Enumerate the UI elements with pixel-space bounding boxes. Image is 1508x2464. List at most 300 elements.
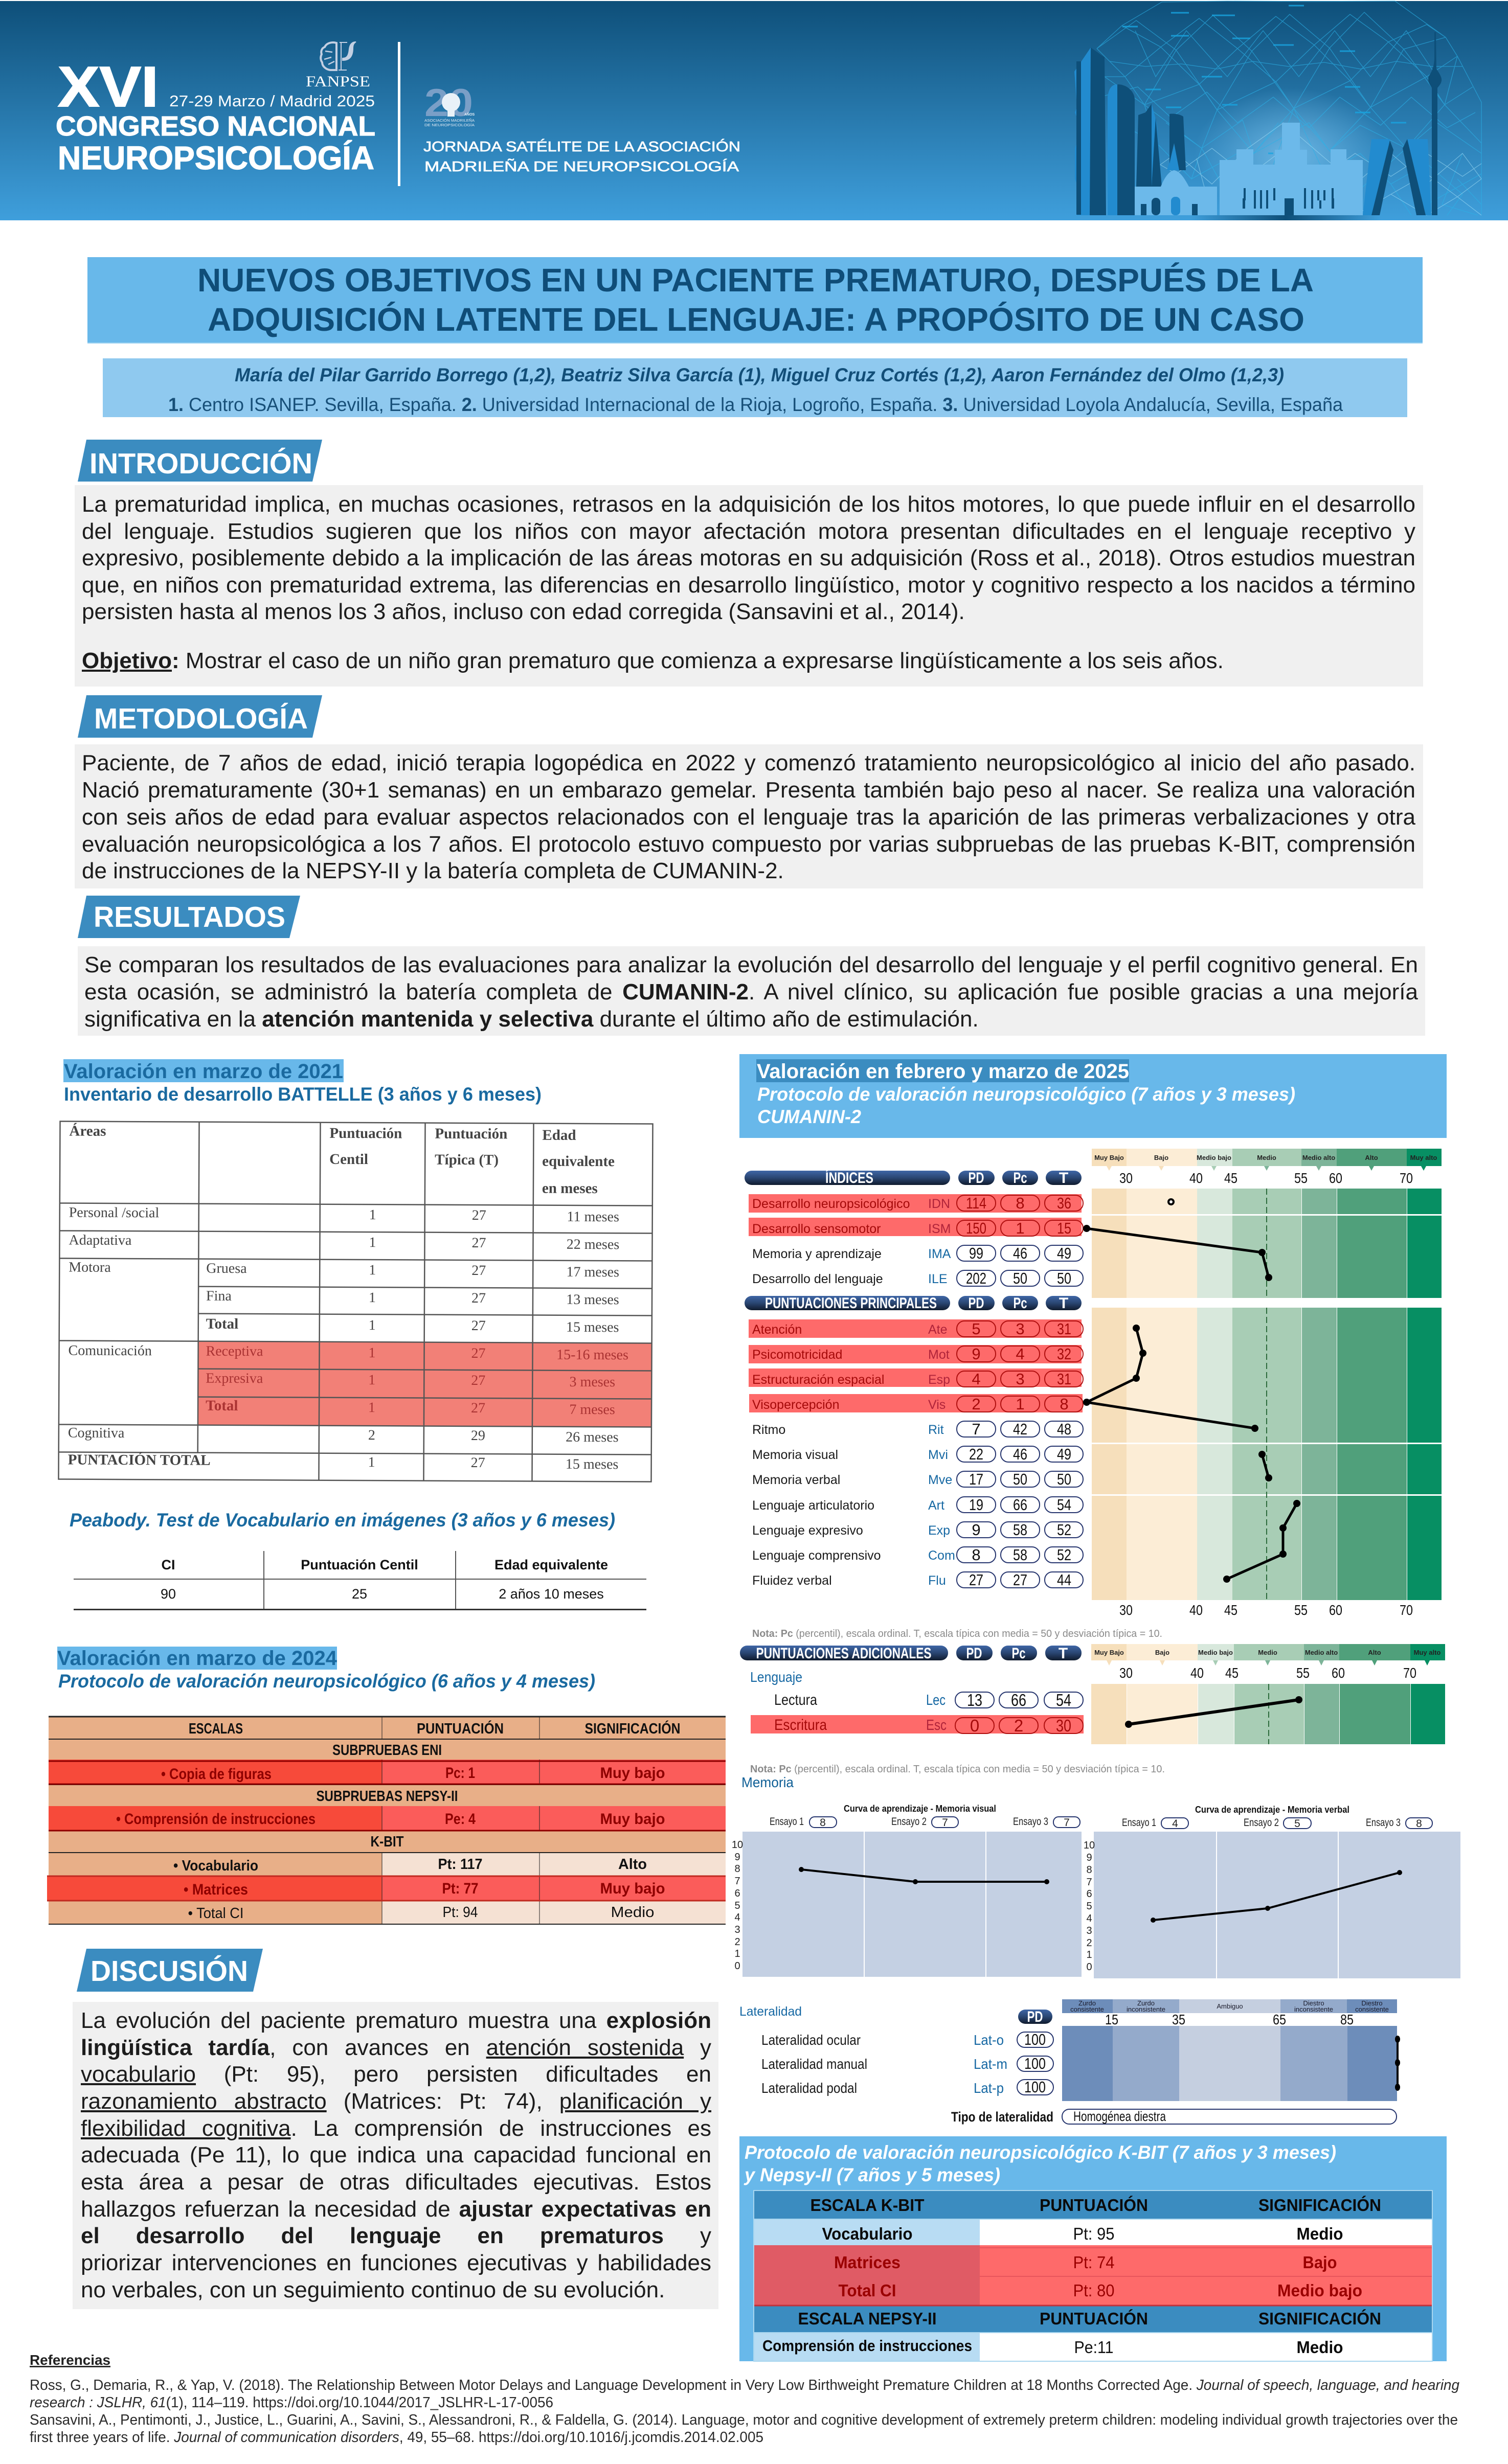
table: K-BIT y Nepsy-II: Pe:11 bbox=[1074, 2338, 1114, 2357]
heading: Introducción: INTRODUCCIÓN bbox=[89, 447, 312, 480]
icon: FANPSE logo bbox=[306, 42, 370, 90]
panel: resultados text: esta ocasión, se administró la batería completa de CUMANIN-2. A nivel clínico, su aplicación fue posible gracias a una mejoría bbox=[84, 979, 1418, 1005]
table: Battelle scores: equivalente bbox=[542, 1153, 615, 1170]
row: Estructuración espacial bbox=[749, 1368, 1083, 1388]
chart: lateralidad: Homogénea diestra bbox=[1073, 2109, 1166, 2124]
panel: introducción text: del lenguaje. Estudios sugieren que los niños con mayor afectación motora presentan dificultades en el lenguaje receptivo y bbox=[82, 519, 1415, 544]
heading: K-BIT: y Nepsy-II (7 años y 5 meses) bbox=[744, 2164, 1000, 2185]
row: Lenguaje articulatorio bbox=[752, 1496, 1083, 1514]
row: Lenguaje comprensivo: 52 bbox=[1057, 1546, 1071, 1564]
row: Psicomotricidad: 4 bbox=[1016, 1345, 1025, 1363]
heading: K-BIT: Protocolo de valoración neuropsicológico K-BIT (7 años y 3 meses) bbox=[745, 2142, 1336, 2163]
panel: discusión text: esta área a pesar de otras dificultades ejecutivas. Estos bbox=[81, 2170, 711, 2195]
table: valoración 2024: Pt: 77 bbox=[442, 1880, 479, 1897]
chart: lateralidad: consistente bbox=[1070, 2005, 1104, 2013]
panel: discusión text: La evolución del paciente prematuro muestra una explosión bbox=[81, 2008, 711, 2033]
pills: índices header: PD bbox=[969, 1170, 984, 1187]
row: Visopercepción: Vis bbox=[928, 1398, 946, 1412]
chart: curva de aprendizaje memoria visual: 9 bbox=[734, 1852, 740, 1863]
chart: curva de aprendizaje memoria visual: 2 bbox=[734, 1936, 740, 1948]
row: Memoria y aprendizaje: 46 bbox=[1013, 1244, 1027, 1262]
table: Battelle scores: 15 meses bbox=[566, 1319, 619, 1335]
row: Estructuración espacial: 31 bbox=[1057, 1370, 1071, 1388]
chart legend: adicionales bands: 30 bbox=[1119, 1665, 1133, 1681]
table: Peabody: 25 bbox=[352, 1586, 367, 1602]
label: Lateralidad: Lateralidad bbox=[739, 2004, 802, 2019]
table: Battelle scores: 1 bbox=[369, 1207, 376, 1223]
table: Battelle scores: 1 bbox=[369, 1262, 376, 1278]
panel: discusión text: hallazgos refuerzan la necesidad de ajustar expectativas en bbox=[81, 2197, 711, 2222]
chart: adicionales profile bbox=[1091, 1684, 1445, 1744]
table: K-BIT y Nepsy-II: Pt: 95 bbox=[1073, 2224, 1115, 2243]
objetivo: Objetivo: Mostrar el caso de un niño gran prematuro que comienza a expresarse lingüísticamente a los seis años. bbox=[82, 648, 1224, 673]
pills: índices header: ÍNDICES bbox=[825, 1169, 873, 1187]
table: K-BIT y Nepsy-II: Medio bajo bbox=[1277, 2281, 1362, 2300]
panel: resultados text: Se comparan los resultados de las evaluaciones para analizar la evolución del desarrollo del lenguaje y el perfil cognitivo general. En bbox=[84, 952, 1418, 977]
chart: curva de aprendizaje memoria visual: Ensayo 1 bbox=[770, 1816, 804, 1828]
chart: puntuaciones principales profile: 60 bbox=[1329, 1602, 1342, 1618]
pills: puntuaciones principales header: Pc bbox=[1014, 1295, 1027, 1312]
chart legend: score bands: Alto bbox=[1365, 1154, 1378, 1161]
table: Peabody: Edad equivalente bbox=[494, 1557, 608, 1572]
congress title XVI bbox=[56, 55, 375, 176]
table: Battelle scores bbox=[58, 1121, 653, 1482]
panel: valoración marzo 2024 heading: Protocolo de valoración neuropsicológico (6 años y 4 meses) bbox=[58, 1671, 595, 1692]
row: Lenguaje articulatorio: 54 bbox=[1057, 1496, 1071, 1514]
row: Memoria y aprendizaje: Memoria y aprendizaje bbox=[752, 1247, 882, 1261]
chart: curva de aprendizaje memoria verbal: 1 bbox=[1086, 1949, 1092, 1960]
chart: lateralidad: Diestro bbox=[1361, 1999, 1383, 2007]
chart: lateralidad: Zurdo bbox=[1137, 1999, 1155, 2007]
table: Battelle scores: 11 meses bbox=[567, 1209, 619, 1225]
row: Desarrollo del lenguaje: Desarrollo del lenguaje bbox=[752, 1272, 883, 1286]
chart: puntuaciones principales profile: 45 bbox=[1224, 1602, 1237, 1618]
chart: lateralidad: Ambiguo bbox=[1217, 2002, 1243, 2010]
table: Battelle scores: 17 meses bbox=[566, 1264, 619, 1280]
table: valoración 2024: • Copia de figuras bbox=[161, 1766, 272, 1783]
table: Battelle scores: Adaptativa bbox=[69, 1233, 132, 1248]
chart: lateralidad: Tipo de lateralidad bbox=[951, 2109, 1053, 2125]
row: Psicomotricidad bbox=[749, 1345, 1083, 1363]
chart: índices profile bbox=[1083, 1189, 1442, 1298]
chart: curva de aprendizaje memoria visual: 10 bbox=[732, 1839, 743, 1851]
chart legend: score bands: Medio bajo bbox=[1197, 1154, 1231, 1161]
row: Atención: 31 bbox=[1057, 1320, 1071, 1338]
table: K-BIT y Nepsy-II: Comprensión de instrucciones bbox=[762, 2337, 972, 2355]
row: Visopercepción bbox=[749, 1394, 1083, 1413]
chart legend: score bands: 60 bbox=[1329, 1170, 1342, 1186]
chart: curva de aprendizaje memoria visual: 7 bbox=[1064, 1817, 1070, 1829]
chart: lateralidad: Zurdo bbox=[1078, 1999, 1096, 2007]
table: Battelle scores: PUNTACIÓN TOTAL bbox=[68, 1451, 211, 1469]
table: valoración 2024 bbox=[47, 1717, 726, 1924]
table: Battelle scores: 27 bbox=[471, 1373, 485, 1388]
chart legend: score bands: Medio alto bbox=[1302, 1154, 1335, 1161]
row: Desarrollo del lenguaje: 202 bbox=[966, 1269, 986, 1287]
panel: resultados text: significativa en la atención mantenida y selectiva durante el último año de estimulación. bbox=[84, 1007, 979, 1032]
row: Memoria visual: Memoria visual bbox=[752, 1448, 838, 1462]
label: Memoria: Memoria bbox=[741, 1774, 794, 1790]
row: Lenguaje expresivo: Lenguaje expresivo bbox=[752, 1523, 863, 1538]
table: Battelle scores: 27 bbox=[471, 1400, 485, 1416]
table: Battelle scores: Puntuación bbox=[329, 1125, 402, 1142]
header banner bbox=[0, 1, 1508, 220]
row: Escritura: Esc bbox=[926, 1717, 947, 1733]
row: Desarrollo neuropsicológico: 8 bbox=[1016, 1194, 1025, 1212]
table: Battelle scores: 27 bbox=[471, 1455, 485, 1471]
chart legend: score bands: 30 bbox=[1119, 1170, 1133, 1186]
chart: lateralidad: inconsistente bbox=[1294, 2005, 1333, 2013]
panel: discusión text: priorizar intervenciones en funciones ejecutivas y habilidades bbox=[81, 2250, 711, 2275]
table: valoración 2024: Muy bajo bbox=[600, 1765, 665, 1782]
table: Battelle scores: 1 bbox=[368, 1345, 376, 1361]
row: Psicomotricidad: Psicomotricidad bbox=[752, 1348, 842, 1362]
table: Battelle scores: Total bbox=[206, 1316, 238, 1332]
chart: curva de aprendizaje memoria visual: 1 bbox=[734, 1948, 740, 1959]
chart: lateralidad: 35 bbox=[1172, 2012, 1185, 2027]
chart: curva de aprendizaje memoria verbal: Ensayo 1 bbox=[1122, 1817, 1156, 1829]
row: Estructuración espacial: Estructuración espacial bbox=[752, 1373, 884, 1387]
chart: curva de aprendizaje memoria verbal: 8 bbox=[1416, 1818, 1422, 1830]
row: Psicomotricidad: 32 bbox=[1057, 1345, 1071, 1363]
panel: valoración 2025 heading: Valoración en febrero y marzo de 2025 bbox=[757, 1060, 1129, 1083]
table: Battelle scores: 22 meses bbox=[567, 1237, 619, 1252]
row: Lenguaje expresivo: Exp bbox=[928, 1523, 950, 1538]
table: Battelle scores: 27 bbox=[472, 1207, 486, 1223]
heading: Peabody: Peabody. Test de Vocabulario en imágenes (3 años y 6 meses) bbox=[70, 1510, 615, 1531]
table: Battelle scores: Total bbox=[206, 1398, 238, 1414]
table: K-BIT y Nepsy-II: Medio bbox=[1297, 2224, 1343, 2243]
chart: curva de aprendizaje memoria verbal: Ensayo 3 bbox=[1366, 1817, 1401, 1829]
table: valoración 2024: • Total CI bbox=[188, 1905, 243, 1922]
panel: metodología text: con seis años de edad para evaluar aspectos relacionados con el lenguaje tras la aparición de las primeras verbalizaciones y otra bbox=[82, 805, 1415, 830]
panel: discusión text: el desarrollo del lenguaje en prematuros y bbox=[81, 2223, 711, 2248]
chart: curva de aprendizaje memoria verbal: Ensayo 2 bbox=[1244, 1817, 1279, 1829]
table: valoración 2024: Medio bbox=[611, 1904, 655, 1921]
row: Lenguaje comprensivo: 8 bbox=[972, 1546, 981, 1564]
panel: valoración marzo 2021 heading: Inventario de desarrollo BATTELLE (3 años y 6 meses) bbox=[64, 1084, 542, 1105]
row: Memoria verbal: 17 bbox=[969, 1470, 983, 1488]
chart: curva de aprendizaje memoria visual: 8 bbox=[734, 1863, 740, 1875]
table: Battelle scores: 15 meses bbox=[566, 1456, 618, 1472]
chart legend: adicionales bands: 60 bbox=[1332, 1665, 1345, 1681]
authors and affiliations: 1. Centro ISANEP. Sevilla, España. 2. Universidad Internacional de la Rioja, Logroño, España. 3. Universidad Loyola Andalucía, Sevilla, España bbox=[168, 394, 1343, 415]
chart: curva de aprendizaje memoria visual: 4 bbox=[734, 1912, 740, 1923]
table: valoración 2024: Muy bajo bbox=[600, 1880, 665, 1897]
row: Desarrollo sensomotor bbox=[749, 1218, 1083, 1237]
table: K-BIT y Nepsy-II: ESCALA K-BIT bbox=[810, 2196, 925, 2215]
row: Lenguaje articulatorio: 66 bbox=[1013, 1496, 1027, 1514]
table: Battelle scores: Motora bbox=[69, 1260, 111, 1275]
row: Desarrollo del lenguaje bbox=[752, 1269, 1083, 1287]
panel: introducción text: que, en niños con prematuridad extrema, las diferencias en desarrollo lingüístico, motor y cognitivo respecto a los nacidos a término bbox=[82, 573, 1415, 598]
panel: metodología text: Paciente, de 7 años de edad, inició terapia logopédica en 2022 y comenzó tratamiento neuropsicológico al inicio del año pasado. bbox=[82, 750, 1415, 775]
table: Battelle scores: 1 bbox=[369, 1235, 376, 1250]
chart: lateralidad: 15 bbox=[1105, 2012, 1118, 2027]
table: Battelle scores: 1 bbox=[368, 1372, 375, 1388]
table: Peabody: Puntuación Centil bbox=[301, 1557, 418, 1572]
pills: puntuaciones principales header: PD bbox=[969, 1295, 984, 1312]
row: Estructuración espacial: 4 bbox=[972, 1370, 981, 1388]
panel: valoración marzo 2024 heading: Valoración en marzo de 2024 bbox=[57, 1647, 337, 1670]
chart: curva de aprendizaje memoria verbal: 2 bbox=[1086, 1937, 1092, 1949]
pills: índices header: T bbox=[1059, 1170, 1068, 1187]
chart legend: adicionales bands: 40 bbox=[1190, 1665, 1204, 1681]
row: Memoria verbal: 50 bbox=[1013, 1470, 1027, 1488]
panel: discusión text: adecuada (Pe 11), lo que indica una capacidad funcional en bbox=[81, 2142, 711, 2168]
row: Lenguaje articulatorio: Lenguaje articulatorio bbox=[752, 1498, 874, 1513]
divider bbox=[398, 42, 400, 186]
congress title XVI: NEUROPSICOLOGÍA bbox=[58, 140, 374, 176]
chart legend: score bands: Muy alto bbox=[1410, 1154, 1437, 1161]
table: K-BIT y Nepsy-II: SIGNIFICACIÓN bbox=[1258, 2196, 1381, 2215]
chart: lateralidad: Lat-o bbox=[974, 2032, 1004, 2048]
chart legend: adicionales bands: Alto bbox=[1368, 1649, 1381, 1656]
table: K-BIT y Nepsy-II: Pt: 74 bbox=[1073, 2253, 1115, 2272]
chart: curva de aprendizaje memoria verbal: 8 bbox=[1086, 1864, 1092, 1876]
panel: introducción text: persisten hasta al menos los 3 años, incluso con edad corregida (Sansavini et al., 2014). bbox=[82, 599, 965, 624]
table: Battelle scores: 13 meses bbox=[566, 1292, 619, 1308]
table: valoración 2024: Pt: 94 bbox=[443, 1904, 478, 1921]
icon: 20 years logo: DE NEUROPSICOLOGÍA bbox=[424, 123, 475, 127]
table: valoración 2024: SUBPRUEBAS NEPSY-II bbox=[316, 1788, 458, 1805]
chart: puntuaciones principales profile: 40 bbox=[1189, 1602, 1203, 1618]
row: Desarrollo del lenguaje: ILE bbox=[928, 1272, 948, 1286]
table: Battelle scores: 3 meses bbox=[570, 1374, 615, 1390]
row: Memoria verbal: 50 bbox=[1057, 1470, 1071, 1488]
table: Battelle scores: 15-16 meses bbox=[556, 1347, 628, 1363]
chart: curva de aprendizaje memoria verbal: Curva de aprendizaje - Memoria verbal bbox=[1195, 1805, 1349, 1815]
chart legend: score bands: 55 bbox=[1294, 1170, 1308, 1186]
pills: puntuaciones adicionales header: PD bbox=[966, 1645, 982, 1662]
chart: curva de aprendizaje memoria visual: Ensayo 3 bbox=[1013, 1816, 1048, 1828]
table: Battelle scores: Cognitiva bbox=[68, 1425, 125, 1441]
chart: lateralidad: 100 bbox=[1024, 2030, 1046, 2048]
chart: curva de aprendizaje memoria verbal: 6 bbox=[1086, 1888, 1092, 1900]
table: valoración 2024: Muy bajo bbox=[600, 1811, 665, 1828]
table: valoración 2024: ESCALAS bbox=[189, 1721, 243, 1737]
row: Desarrollo neuropsicológico: 114 bbox=[966, 1194, 986, 1212]
row: Ritmo: Ritmo bbox=[752, 1423, 785, 1437]
pills: puntuaciones adicionales header bbox=[740, 1645, 1082, 1662]
table: Peabody: 90 bbox=[161, 1586, 176, 1602]
chart: lateralidad: Lateralidad manual bbox=[761, 2056, 867, 2072]
title banner: NUEVOS OBJETIVOS EN UN PACIENTE PREMATURO, DESPUÉS DE LA bbox=[197, 262, 1314, 299]
chart: lateralidad: inconsistente bbox=[1127, 2005, 1165, 2013]
pills: puntuaciones principales header: PUNTUACIONES PRINCIPALES bbox=[765, 1295, 937, 1312]
satellite conference text bbox=[423, 139, 740, 174]
chart legend: score bands: Muy Bajo bbox=[1094, 1154, 1124, 1161]
chart: lateralidad: 100 bbox=[1024, 2055, 1046, 2072]
chart: curva de aprendizaje memoria visual: 7 bbox=[734, 1876, 740, 1887]
chart: curva de aprendizaje memoria verbal: 4 bbox=[1172, 1818, 1178, 1830]
table: valoración 2024: K-BIT bbox=[370, 1834, 404, 1850]
row: Memoria y aprendizaje bbox=[752, 1244, 1083, 1262]
chart legend: adicionales bands bbox=[1091, 1644, 1445, 1681]
table: Battelle scores: 1 bbox=[369, 1317, 376, 1333]
chart: lateralidad: consistente bbox=[1355, 2005, 1389, 2013]
chart: curva de aprendizaje memoria verbal: 9 bbox=[1086, 1852, 1092, 1863]
panel: discusión text: razonamiento abstracto (Matrices: Pt: 74), planificación y bbox=[81, 2089, 711, 2114]
row: Lectura: 66 bbox=[1011, 1691, 1026, 1709]
row: Memoria y aprendizaje: 99 bbox=[969, 1244, 983, 1262]
pills: puntuaciones adicionales header: PUNTUACIONES ADICIONALES bbox=[756, 1645, 932, 1662]
row: Lenguaje expresivo: 58 bbox=[1013, 1521, 1027, 1539]
authors and affiliations: María del Pilar Garrido Borrego (1,2), Beatriz Silva García (1), Miguel Cruz Cortés (1,2), Aaron Fernández del Olmo (1,2,3) bbox=[235, 364, 1284, 385]
row: Memoria visual bbox=[752, 1445, 1083, 1463]
chart: curva de aprendizaje memoria visual: Curva de aprendizaje - Memoria visual bbox=[844, 1804, 996, 1814]
chart legend: score bands: 70 bbox=[1400, 1170, 1413, 1186]
table: Battelle scores: 27 bbox=[471, 1263, 486, 1279]
table: Battelle scores: Fina bbox=[206, 1288, 232, 1304]
table: Battelle scores: 29 bbox=[471, 1428, 485, 1444]
chart: lateralidad: 100 bbox=[1024, 2078, 1046, 2096]
chart: curva de aprendizaje memoria verbal: 4 bbox=[1086, 1913, 1092, 1924]
row: Ritmo: 48 bbox=[1057, 1420, 1071, 1438]
chart legend: score bands: 45 bbox=[1224, 1170, 1237, 1186]
panel: discusión text: vocabulario (Pt: 95), pero persisten dificultades en bbox=[81, 2062, 711, 2087]
panel: introducción text: expresivo, posiblemente debido a la implicación de las áreas motoras en su adquisición (Ross et al., 2018). Otros estudios muestran bbox=[82, 545, 1415, 571]
congress title XVI: CONGRESO NACIONAL bbox=[56, 111, 375, 142]
panel: discusión text: lingüística tardía, con avances en atención sostenida y bbox=[81, 2035, 711, 2060]
row: Desarrollo del lenguaje: 50 bbox=[1013, 1269, 1027, 1287]
chart legend: score bands bbox=[1092, 1149, 1442, 1186]
row: Lenguaje comprensivo bbox=[752, 1546, 1083, 1564]
chart: puntuaciones principales profile: 30 bbox=[1119, 1602, 1133, 1618]
chart: curva de aprendizaje memoria visual: 5 bbox=[734, 1900, 740, 1911]
chart: lateralidad: 65 bbox=[1273, 2012, 1286, 2027]
table: K-BIT y Nepsy-II: PUNTUACIÓN bbox=[1040, 2196, 1148, 2215]
row: Lenguaje comprensivo: Lenguaje comprensivo bbox=[752, 1548, 881, 1563]
row: Visopercepción: 8 bbox=[1060, 1395, 1069, 1413]
chart legend: adicionales bands: Medio bbox=[1258, 1649, 1277, 1656]
row: Escritura: Escritura bbox=[774, 1717, 827, 1733]
table: Battelle scores: 27 bbox=[471, 1235, 486, 1251]
row: Fluidez verbal bbox=[752, 1571, 1083, 1589]
table: valoración 2024: Pe: 4 bbox=[445, 1811, 476, 1828]
row: Estructuración espacial: 3 bbox=[1016, 1370, 1025, 1388]
row: Escritura: 0 bbox=[970, 1716, 979, 1735]
chart: lateralidad bbox=[739, 1999, 1400, 2125]
chart: curva de aprendizaje memoria verbal bbox=[1084, 1805, 1460, 1978]
row: Lenguaje expresivo: 52 bbox=[1057, 1521, 1071, 1539]
chart legend: adicionales bands: 55 bbox=[1296, 1665, 1310, 1681]
references: Sansavini, A., Pentimonti, J., Justice, L., Guarini, A., Savini, S., Alessandroni, R., & Faldella, G. (2014). Language, motor and cognitive development of extremely preterm children: modeling individual growth trajectories over the bbox=[30, 2412, 1458, 2428]
satellite conference text: MADRILEÑA DE NEUROPSICOLOGÍA bbox=[424, 158, 739, 174]
table: K-BIT y Nepsy-II: Matrices bbox=[834, 2253, 901, 2272]
row: Lectura: Lectura bbox=[774, 1692, 817, 1708]
pills: puntuaciones adicionales header: T bbox=[1059, 1645, 1068, 1662]
table: K-BIT y Nepsy-II: Bajo bbox=[1303, 2253, 1337, 2272]
row: Memoria verbal bbox=[752, 1470, 1083, 1488]
row: Memoria y aprendizaje: 49 bbox=[1057, 1244, 1071, 1262]
table: Battelle scores: Personal /social bbox=[69, 1205, 160, 1221]
row: Atención bbox=[749, 1319, 1083, 1338]
heading: Metodología: METODOLOGÍA bbox=[94, 702, 308, 735]
chart legend: adicionales bands: 45 bbox=[1225, 1665, 1239, 1681]
chart legend: score bands: Medio bbox=[1257, 1154, 1276, 1161]
chart: curva de aprendizaje memoria verbal: 10 bbox=[1084, 1840, 1095, 1851]
chart legend: adicionales bands: Bajo bbox=[1155, 1649, 1169, 1656]
chart: lateralidad: Lat-m bbox=[974, 2056, 1007, 2072]
pills: puntuaciones principales header bbox=[745, 1295, 1082, 1312]
table: Battelle scores: Gruesa bbox=[206, 1261, 247, 1276]
table: Battelle scores: Expresiva bbox=[206, 1371, 263, 1386]
row: Memoria visual: 46 bbox=[1013, 1445, 1027, 1463]
pills: índices header bbox=[745, 1169, 1082, 1187]
icon: 20 years logo: AÑOS bbox=[464, 112, 475, 117]
table: K-BIT y Nepsy-II: PUNTUACIÓN bbox=[1040, 2309, 1148, 2328]
table: Peabody bbox=[74, 1551, 646, 1610]
row: Desarrollo sensomotor: 150 bbox=[966, 1219, 986, 1237]
chart: curva de aprendizaje memoria verbal: 3 bbox=[1086, 1925, 1092, 1936]
table: Battelle scores: Receptiva bbox=[206, 1343, 263, 1359]
chart: lateralidad: 85 bbox=[1340, 2012, 1354, 2027]
chart legend: adicionales bands: Muy Bajo bbox=[1094, 1649, 1124, 1656]
table: Battelle scores: Típica (T) bbox=[435, 1152, 499, 1168]
chart legend: adicionales bands: Medio bajo bbox=[1198, 1649, 1233, 1656]
chart: curva de aprendizaje memoria visual: 6 bbox=[734, 1888, 740, 1899]
row: Lenguaje expresivo: 9 bbox=[972, 1521, 981, 1539]
table: K-BIT y Nepsy-II: SIGNIFICACIÓN bbox=[1258, 2309, 1381, 2328]
icon: Madrid skyline with network dome bbox=[1074, 1, 1481, 220]
table: Battelle scores: 27 bbox=[471, 1345, 486, 1361]
note: escala 1: Nota: Pc (percentil), escala ordinal. T, escala típica con media = 50 y desviación típica = 10. bbox=[752, 1628, 1162, 1639]
icon: FANPSE logo: FANPSE bbox=[306, 73, 370, 90]
chart legend: score bands: 40 bbox=[1189, 1170, 1203, 1186]
row: Desarrollo neuropsicológico: IDN bbox=[928, 1197, 950, 1211]
table: Battelle scores: 1 bbox=[368, 1400, 375, 1416]
table: K-BIT y Nepsy-II bbox=[754, 2191, 1432, 2361]
chart legend: adicionales bands: Muy alto bbox=[1414, 1649, 1441, 1656]
heading: Resultados bbox=[78, 896, 300, 938]
row: Fluidez verbal: 27 bbox=[969, 1571, 983, 1589]
authors and affiliations bbox=[103, 358, 1407, 417]
chart: lateralidad: Lat-p bbox=[974, 2080, 1004, 2096]
row: Escritura: 2 bbox=[1014, 1716, 1023, 1735]
references: Ross, G., Demaria, R., & Yap, V. (2018). The Relationship Between Motor Delays and Language Development in Very Low Birthweight Premature Children at 18 Months Corrected Age. Journal of speech, language, and hearing bbox=[30, 2377, 1459, 2393]
table: valoración 2024: SUBPRUEBAS ENI bbox=[332, 1742, 442, 1759]
row: Memoria verbal: Memoria verbal bbox=[752, 1473, 840, 1487]
row: Ritmo bbox=[752, 1420, 1083, 1438]
chart legend: score bands: Bajo bbox=[1154, 1154, 1168, 1161]
panel: metodología text: Nació prematuramente (30+1 semanas) en un embarazo gemelar. Presenta también bajo peso al nacer. Se realiza una valoración bbox=[82, 778, 1415, 803]
chart: curva de aprendizaje memoria verbal: 0 bbox=[1086, 1961, 1092, 1973]
row: Memoria visual: 49 bbox=[1057, 1445, 1071, 1463]
references: first three years of life. Journal of communication disorders, 49, 55–68. https://doi.org/10.1016/j.jcomdis.2014.02.005 bbox=[30, 2429, 763, 2446]
row: Memoria visual: 22 bbox=[969, 1445, 983, 1463]
table: K-BIT y Nepsy-II: Medio bbox=[1297, 2338, 1343, 2357]
row: Escritura: 30 bbox=[1056, 1716, 1071, 1735]
heading: Resultados: RESULTADOS bbox=[94, 901, 285, 933]
table: valoración 2024: PUNTUACIÓN bbox=[417, 1720, 504, 1737]
row: Fluidez verbal: 44 bbox=[1057, 1571, 1071, 1589]
chart: puntuaciones principales profile: 70 bbox=[1400, 1602, 1413, 1618]
heading: Discusión bbox=[77, 1949, 263, 1992]
row: Lenguaje articulatorio: Art bbox=[928, 1498, 944, 1513]
row: Lenguaje comprensivo: Com bbox=[928, 1548, 955, 1563]
table: valoración 2024: • Vocabulario bbox=[173, 1858, 258, 1874]
table: valoración 2024: Pc: 1 bbox=[445, 1765, 475, 1782]
row: Estructuración espacial: Esp bbox=[928, 1373, 950, 1387]
table: Peabody: CI bbox=[162, 1557, 175, 1572]
row: Psicomotricidad: 9 bbox=[972, 1345, 981, 1363]
heading: K-BIT bbox=[744, 2142, 1336, 2185]
row: Memoria y aprendizaje: IMA bbox=[928, 1247, 951, 1261]
row: Atención: Atención bbox=[752, 1322, 802, 1337]
row: Desarrollo sensomotor: 15 bbox=[1057, 1219, 1071, 1237]
table: Battelle scores: 1 bbox=[369, 1290, 376, 1306]
